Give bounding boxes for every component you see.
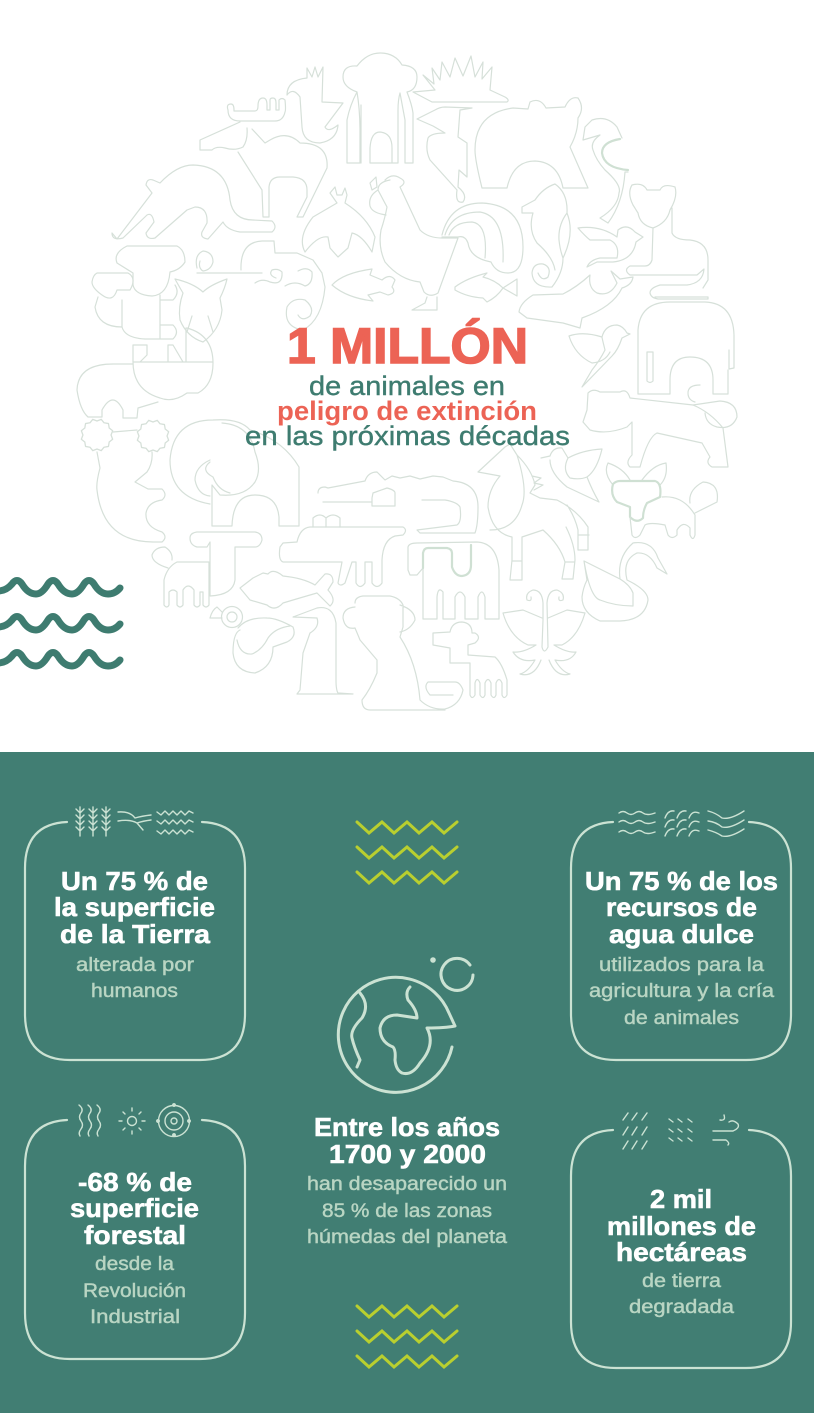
- panel: forest surface: forestal: [84, 1220, 186, 1250]
- icon: rooster tail: [442, 203, 523, 273]
- panel: fresh water: [571, 811, 791, 1060]
- icon: elephant centre bottom: [408, 542, 499, 619]
- illustration: circle of animal outlines: [77, 53, 737, 710]
- icon: cockatoo: [287, 67, 343, 143]
- panel: forest surface: superficie: [70, 1193, 199, 1223]
- description: desde la: [95, 1253, 174, 1275]
- icon: fox: [606, 463, 717, 538]
- panel: degraded land: hectáreas: [616, 1237, 747, 1267]
- panel: forest surface: [25, 1103, 245, 1359]
- subtitle line 3: en las próximas décadas: [245, 421, 570, 451]
- heading: Un 75 % de los: [585, 866, 778, 896]
- icon: sheep body: [77, 328, 213, 418]
- icon: crocodile: [318, 472, 478, 533]
- icon: bear on bear: [626, 184, 708, 299]
- panel: degraded land: millones de: [607, 1211, 756, 1241]
- icon: T-shaped tail: [190, 532, 262, 596]
- box outline: [571, 822, 791, 1060]
- panel: land altered: [25, 807, 245, 1060]
- heading: -68 % de: [78, 1167, 192, 1197]
- heading: Entre los años: [314, 1112, 500, 1142]
- panel: green background: [0, 752, 814, 1413]
- icon: owl: [175, 279, 227, 342]
- decoration: lime zigzags top: [357, 822, 457, 883]
- description: han desaparecido un: [307, 1173, 507, 1195]
- icon: water patterns: [619, 811, 744, 836]
- box outline: [25, 822, 245, 1060]
- icon: fish left: [332, 269, 395, 301]
- icon: wheat, branches, waves: [76, 807, 193, 836]
- panel: wetlands text: 85 % de las zonas: [322, 1200, 492, 1222]
- icon: dove: [578, 227, 643, 267]
- panel: fresh water: agua dulce: [609, 919, 754, 949]
- icon: hippo: [279, 515, 406, 586]
- decoration: teal waves left: [0, 580, 120, 666]
- icon: elephant cloud head: [92, 246, 185, 339]
- panel: fresh water: de animales: [624, 1007, 739, 1029]
- icon: rain, drizzle, wind: [623, 1113, 738, 1149]
- icon: rooster: [370, 176, 458, 310]
- icon: penguin: [293, 608, 353, 694]
- icon: small animal with curl tail: [152, 547, 209, 607]
- panel: forest surface: Industrial: [90, 1306, 180, 1328]
- box outline: [25, 1120, 245, 1359]
- icon: monkey: [343, 596, 463, 710]
- description: alterada por: [76, 954, 195, 976]
- panel: land altered: de la Tierra: [60, 919, 211, 949]
- icon: seahorse: [522, 184, 570, 287]
- subtitle line 2: peligro de extinción: [277, 396, 537, 426]
- icon: chameleon: [196, 241, 325, 330]
- icon: rat: [433, 622, 507, 698]
- description: de tierra: [642, 1270, 721, 1292]
- panel: wetlands text: húmedas del planeta: [307, 1226, 507, 1248]
- icon: heat, sun, target: [79, 1103, 191, 1137]
- panel: land altered: humanos: [91, 980, 178, 1002]
- icon: butterfly: [503, 590, 585, 675]
- icon: bird above elephant: [569, 325, 630, 387]
- panel: fresh water: agricultura y la cría: [589, 980, 774, 1002]
- icon: bird by horse: [541, 448, 602, 502]
- description: utilizados para la: [599, 954, 764, 976]
- panel: land altered: la superficie: [54, 892, 215, 922]
- panel: wetlands text: 1700 y 2000: [329, 1139, 486, 1169]
- icon: kangaroo: [112, 165, 275, 239]
- title block: [245, 318, 570, 451]
- heading: 1 millón: 1 MILLÓN: [287, 318, 528, 374]
- icon: elephant right: [638, 302, 734, 394]
- box outline: [571, 1130, 791, 1368]
- icon: moose: [200, 98, 327, 217]
- icon: tiger: [583, 385, 737, 467]
- panel: degraded land: degradada: [629, 1296, 734, 1318]
- heading: 2 mil: [650, 1184, 712, 1214]
- icon: whale: [519, 271, 633, 328]
- icon: chick with spiral: [210, 606, 294, 673]
- subtitle line 1: de animales en: [309, 371, 505, 401]
- icon: horse: [478, 444, 589, 580]
- icon: swan: [582, 543, 667, 621]
- icon: fish right: [455, 273, 517, 302]
- icon: pelican: [583, 119, 628, 223]
- decoration: lime zigzags bottom: [357, 1306, 457, 1367]
- panel: degraded land: [571, 1113, 791, 1368]
- icon: woodpecker: [417, 107, 472, 202]
- icon: elephant with curled trunk: [170, 420, 299, 526]
- icon: koala: [81, 419, 169, 542]
- icon: hedgehog: [413, 56, 508, 102]
- heading: Un 75 % de: [61, 866, 208, 896]
- panel: fresh water: recursos de: [606, 892, 757, 922]
- icon: globe: [338, 957, 473, 1092]
- panel: forest surface: Revolución: [83, 1280, 186, 1302]
- icon: bat: [302, 187, 375, 257]
- panel: wetlands text: [307, 1112, 507, 1248]
- icon: bear: [475, 98, 588, 188]
- icon: big fish: [240, 571, 333, 608]
- icon: gorilla: [343, 53, 417, 163]
